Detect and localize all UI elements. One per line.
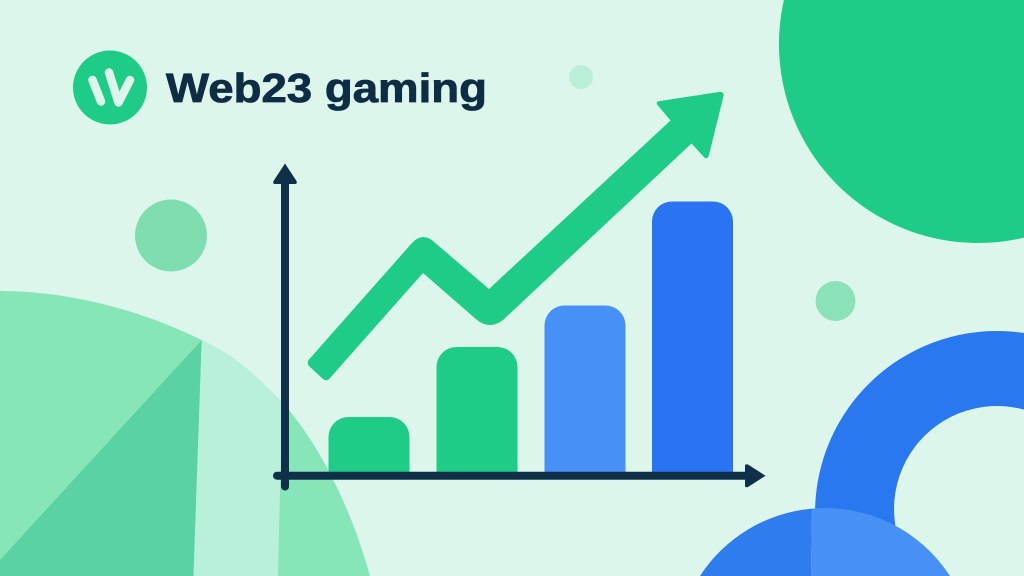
bar 1 [328,417,410,473]
bar chart [328,202,733,473]
shape: blue ring [815,331,1024,576]
circle: left pale green dot [135,200,207,272]
circle: right small dot [816,281,856,321]
y axis [281,180,289,486]
bar 2 [436,347,518,473]
arrow: rising trend [308,92,724,380]
circle: top small dot [569,65,593,89]
chart axes [273,164,766,487]
circle: top right green [779,0,1024,243]
bar 4 [652,202,733,473]
x axis arrowhead [745,464,766,487]
x axis [277,472,750,480]
logo [73,50,487,124]
shape: blue half circle [700,508,950,576]
icon: logo badge [73,50,147,124]
bar 3 [544,306,626,473]
heading: brand name: Web23 gaming [166,65,487,111]
shape: faceted green hill [0,285,375,576]
y axis arrowhead [273,164,297,184]
